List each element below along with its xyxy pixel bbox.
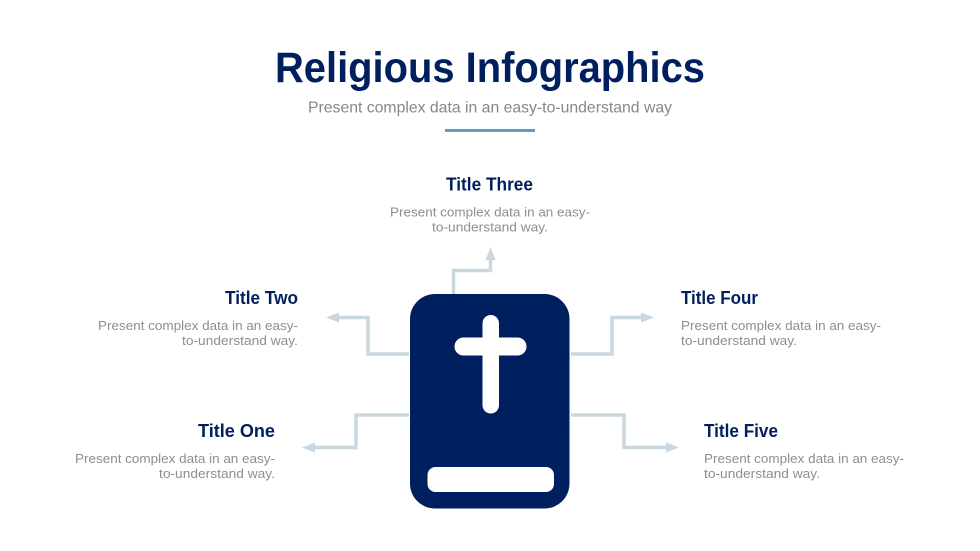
block: title five: to-understand way. xyxy=(704,466,820,481)
block: title three: to-understand way. xyxy=(432,220,548,234)
arrow: to title one xyxy=(302,415,409,452)
block: title one xyxy=(75,420,275,481)
block: title two: to-understand way. xyxy=(182,333,298,348)
title: Religious Infographics xyxy=(275,44,705,92)
arrow: to title four xyxy=(571,312,654,354)
block: title one: Present complex data in an easy- xyxy=(75,451,275,466)
block: title two: Title Two xyxy=(225,287,298,308)
arrow: to title five xyxy=(571,415,679,452)
block: title two: Present complex data in an easy- xyxy=(98,318,298,333)
arrow: to title three xyxy=(454,247,496,294)
block: title three: Title Three xyxy=(446,174,533,194)
block: title three: Present complex data in an easy- xyxy=(390,204,590,220)
block: title five xyxy=(704,420,904,481)
block: title one: Title One xyxy=(198,420,275,441)
block: title two xyxy=(98,287,298,348)
block: title three xyxy=(390,174,590,234)
title underline xyxy=(445,129,535,132)
block: title four: Present complex data in an easy- xyxy=(681,318,881,333)
block: title four xyxy=(681,287,881,348)
block: title five: Title Five xyxy=(704,420,778,441)
arrow: to title two xyxy=(326,312,409,354)
subtitle: Present complex data in an easy-to-understand way xyxy=(308,100,672,116)
block: title one: to-understand way. xyxy=(159,466,275,481)
block: title four: Title Four xyxy=(681,287,758,308)
icon: bible book with cross xyxy=(410,294,570,508)
block: title five: Present complex data in an easy- xyxy=(704,451,904,466)
block: title four: to-understand way. xyxy=(681,333,797,348)
